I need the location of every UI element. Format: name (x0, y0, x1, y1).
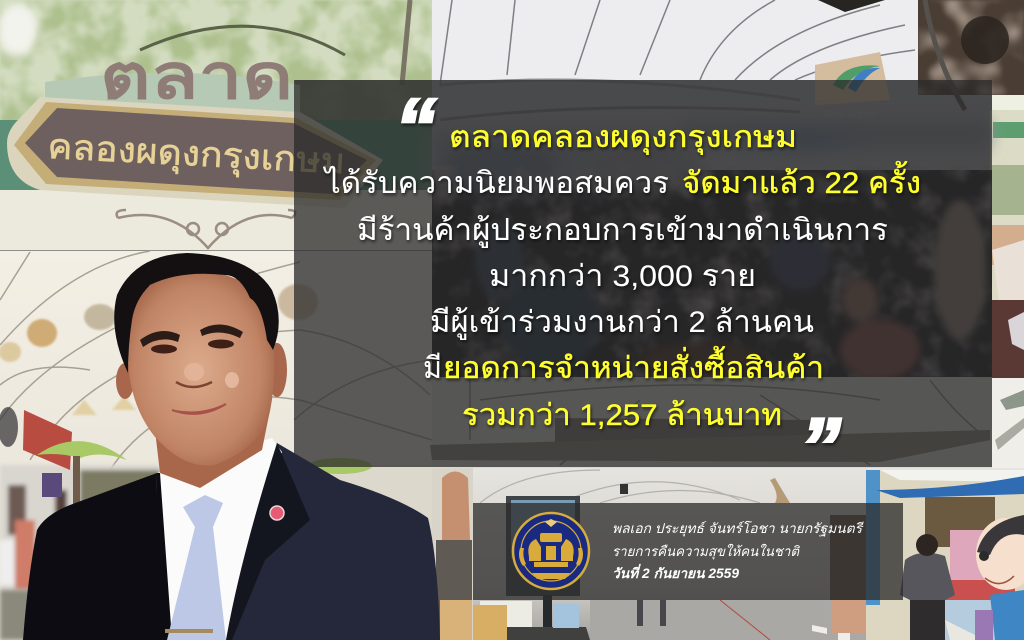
white shirt (155, 438, 282, 640)
portrait: prime minister (23, 253, 440, 640)
neck (155, 420, 268, 488)
icon: cartoon mascot (975, 515, 1024, 640)
quote text: ยอดการจำหน่ายสั่งซื้อสินค้า (443, 346, 824, 385)
face (128, 273, 274, 466)
icon: opening quotation mark: “ (395, 82, 436, 173)
main quote panel (294, 80, 992, 493)
icon: government seal (513, 513, 589, 589)
photo: crowd (430, 120, 992, 472)
photo: market sign and trees (0, 0, 432, 250)
fan (0, 407, 18, 447)
icon: closing quotation mark: ” (800, 402, 841, 493)
photo: tent interior with crowd (430, 0, 1024, 472)
necktie (167, 495, 226, 640)
quote text: มากกว่า 3,000 ราย (489, 260, 756, 293)
sign: market name (7, 43, 383, 208)
sign: market name: ตลาด (100, 43, 293, 112)
lights and screen (818, 0, 885, 12)
quote text (323, 121, 921, 432)
green umbrella (37, 441, 127, 460)
attribution text (612, 520, 864, 581)
quote text: มีร้านค้าผู้ประกอบการเข้ามาดำเนินการ (357, 214, 888, 248)
quote text: จัดมาแล้ว 22 ครั้ง (682, 161, 921, 200)
attribution panel (473, 503, 903, 600)
person in long skirt (812, 515, 866, 640)
market stalls behind (0, 465, 160, 595)
attribution text: พลเอก ประยุทธ์ จันทร์โอชา นายกรัฐมนตรี (612, 520, 864, 537)
ears (116, 363, 134, 399)
quote text: ตลาดคลองผดุงกรุงเกษม (449, 121, 797, 156)
photo: exhibition hall floor (432, 468, 1024, 640)
attribution text: รายการคืนความสุขให้คนในชาติ (612, 543, 800, 560)
suit jacket left (23, 473, 172, 640)
market stall at right (866, 470, 1024, 640)
suit jacket right (222, 443, 440, 640)
quote text: มี (423, 352, 442, 385)
quote text: มีผู้เข้าร่วมงานกว่า 2 ล้านคน (430, 306, 814, 340)
attribution text: วันที่ 2 กันยายน 2559 (612, 563, 739, 581)
quote text: รวมกว่า 1,257 ล้านบาท (462, 399, 782, 432)
poster board at right (990, 95, 1024, 470)
banner (23, 410, 72, 470)
facial features (140, 324, 243, 414)
display screen stand (473, 496, 590, 640)
photo: fan at upper right (918, 0, 1024, 110)
photo: white tent with lanterns (0, 250, 440, 640)
flag: SME Bank: SME Bank (822, 109, 877, 121)
lapel (226, 443, 310, 640)
shopper in checked shirt (900, 534, 955, 640)
lapel pin (270, 506, 284, 520)
hair (114, 253, 279, 373)
sign: market name: คลองผดุงกรุงเกษม (47, 127, 346, 183)
flag: SME Bank (815, 52, 890, 121)
quote text: ได้รับความนิยมพอสมควร (323, 165, 669, 200)
